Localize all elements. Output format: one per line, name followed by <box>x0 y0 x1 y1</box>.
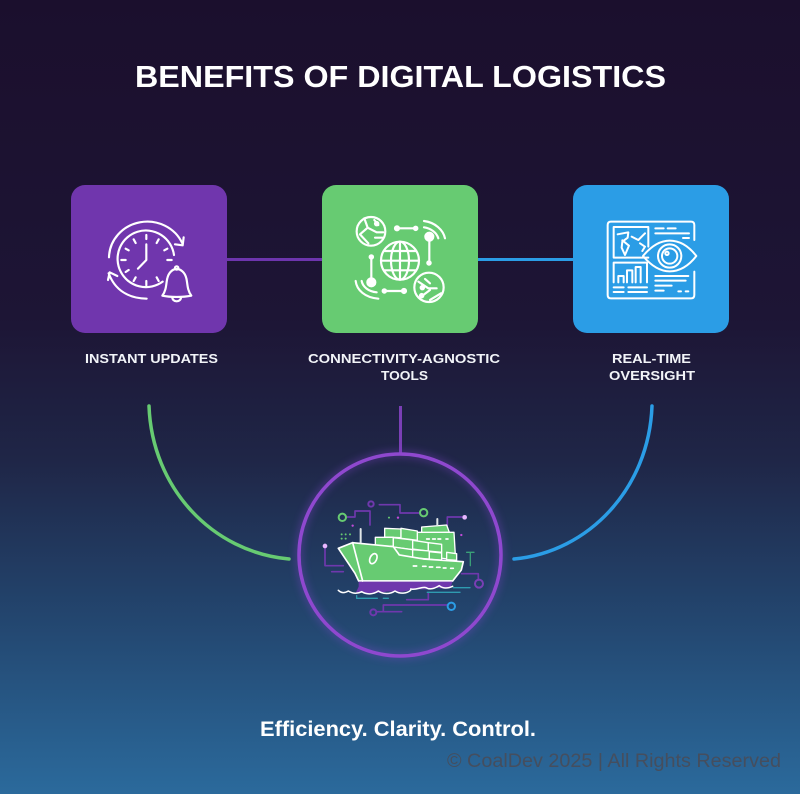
icon: connected globes <box>356 217 445 302</box>
copyright: © CoalDev 2025 | All Rights Reserved <box>447 751 781 772</box>
label: instant updates: INSTANT UPDATES <box>85 351 218 366</box>
ship emblem <box>299 454 501 656</box>
connector: blue <box>476 258 576 261</box>
arc: green connector <box>149 406 289 559</box>
waves <box>338 586 453 594</box>
label: connectivity-agnostic tools: CONNECTIVITY-AGNOSTIC <box>308 351 501 366</box>
arc: blue connector <box>514 406 652 559</box>
label: connectivity-agnostic tools <box>308 351 501 383</box>
label: connectivity-agnostic tools: TOOLS <box>381 368 428 383</box>
panel: real-time oversight <box>573 185 729 333</box>
hull <box>338 543 463 581</box>
title: BENEFITS OF DIGITAL LOGISTICS <box>135 59 666 94</box>
tagline: Efficiency. Clarity. Control. <box>260 718 536 741</box>
circuit traces <box>325 505 478 612</box>
connector: purple <box>225 258 325 261</box>
panel: connectivity-agnostic tools <box>322 185 478 333</box>
panel: instant updates <box>71 185 227 333</box>
label: real-time oversight: REAL-TIME <box>612 351 691 366</box>
icon: clock and bell <box>108 222 191 301</box>
containers and superstructure <box>375 525 457 560</box>
icon: dashboard with eye <box>608 222 696 298</box>
label: real-time oversight: OVERSIGHT <box>609 368 695 383</box>
icon: cargo ship <box>323 501 483 615</box>
label: real-time oversight <box>609 351 695 383</box>
connector: vertical purple <box>399 406 402 454</box>
